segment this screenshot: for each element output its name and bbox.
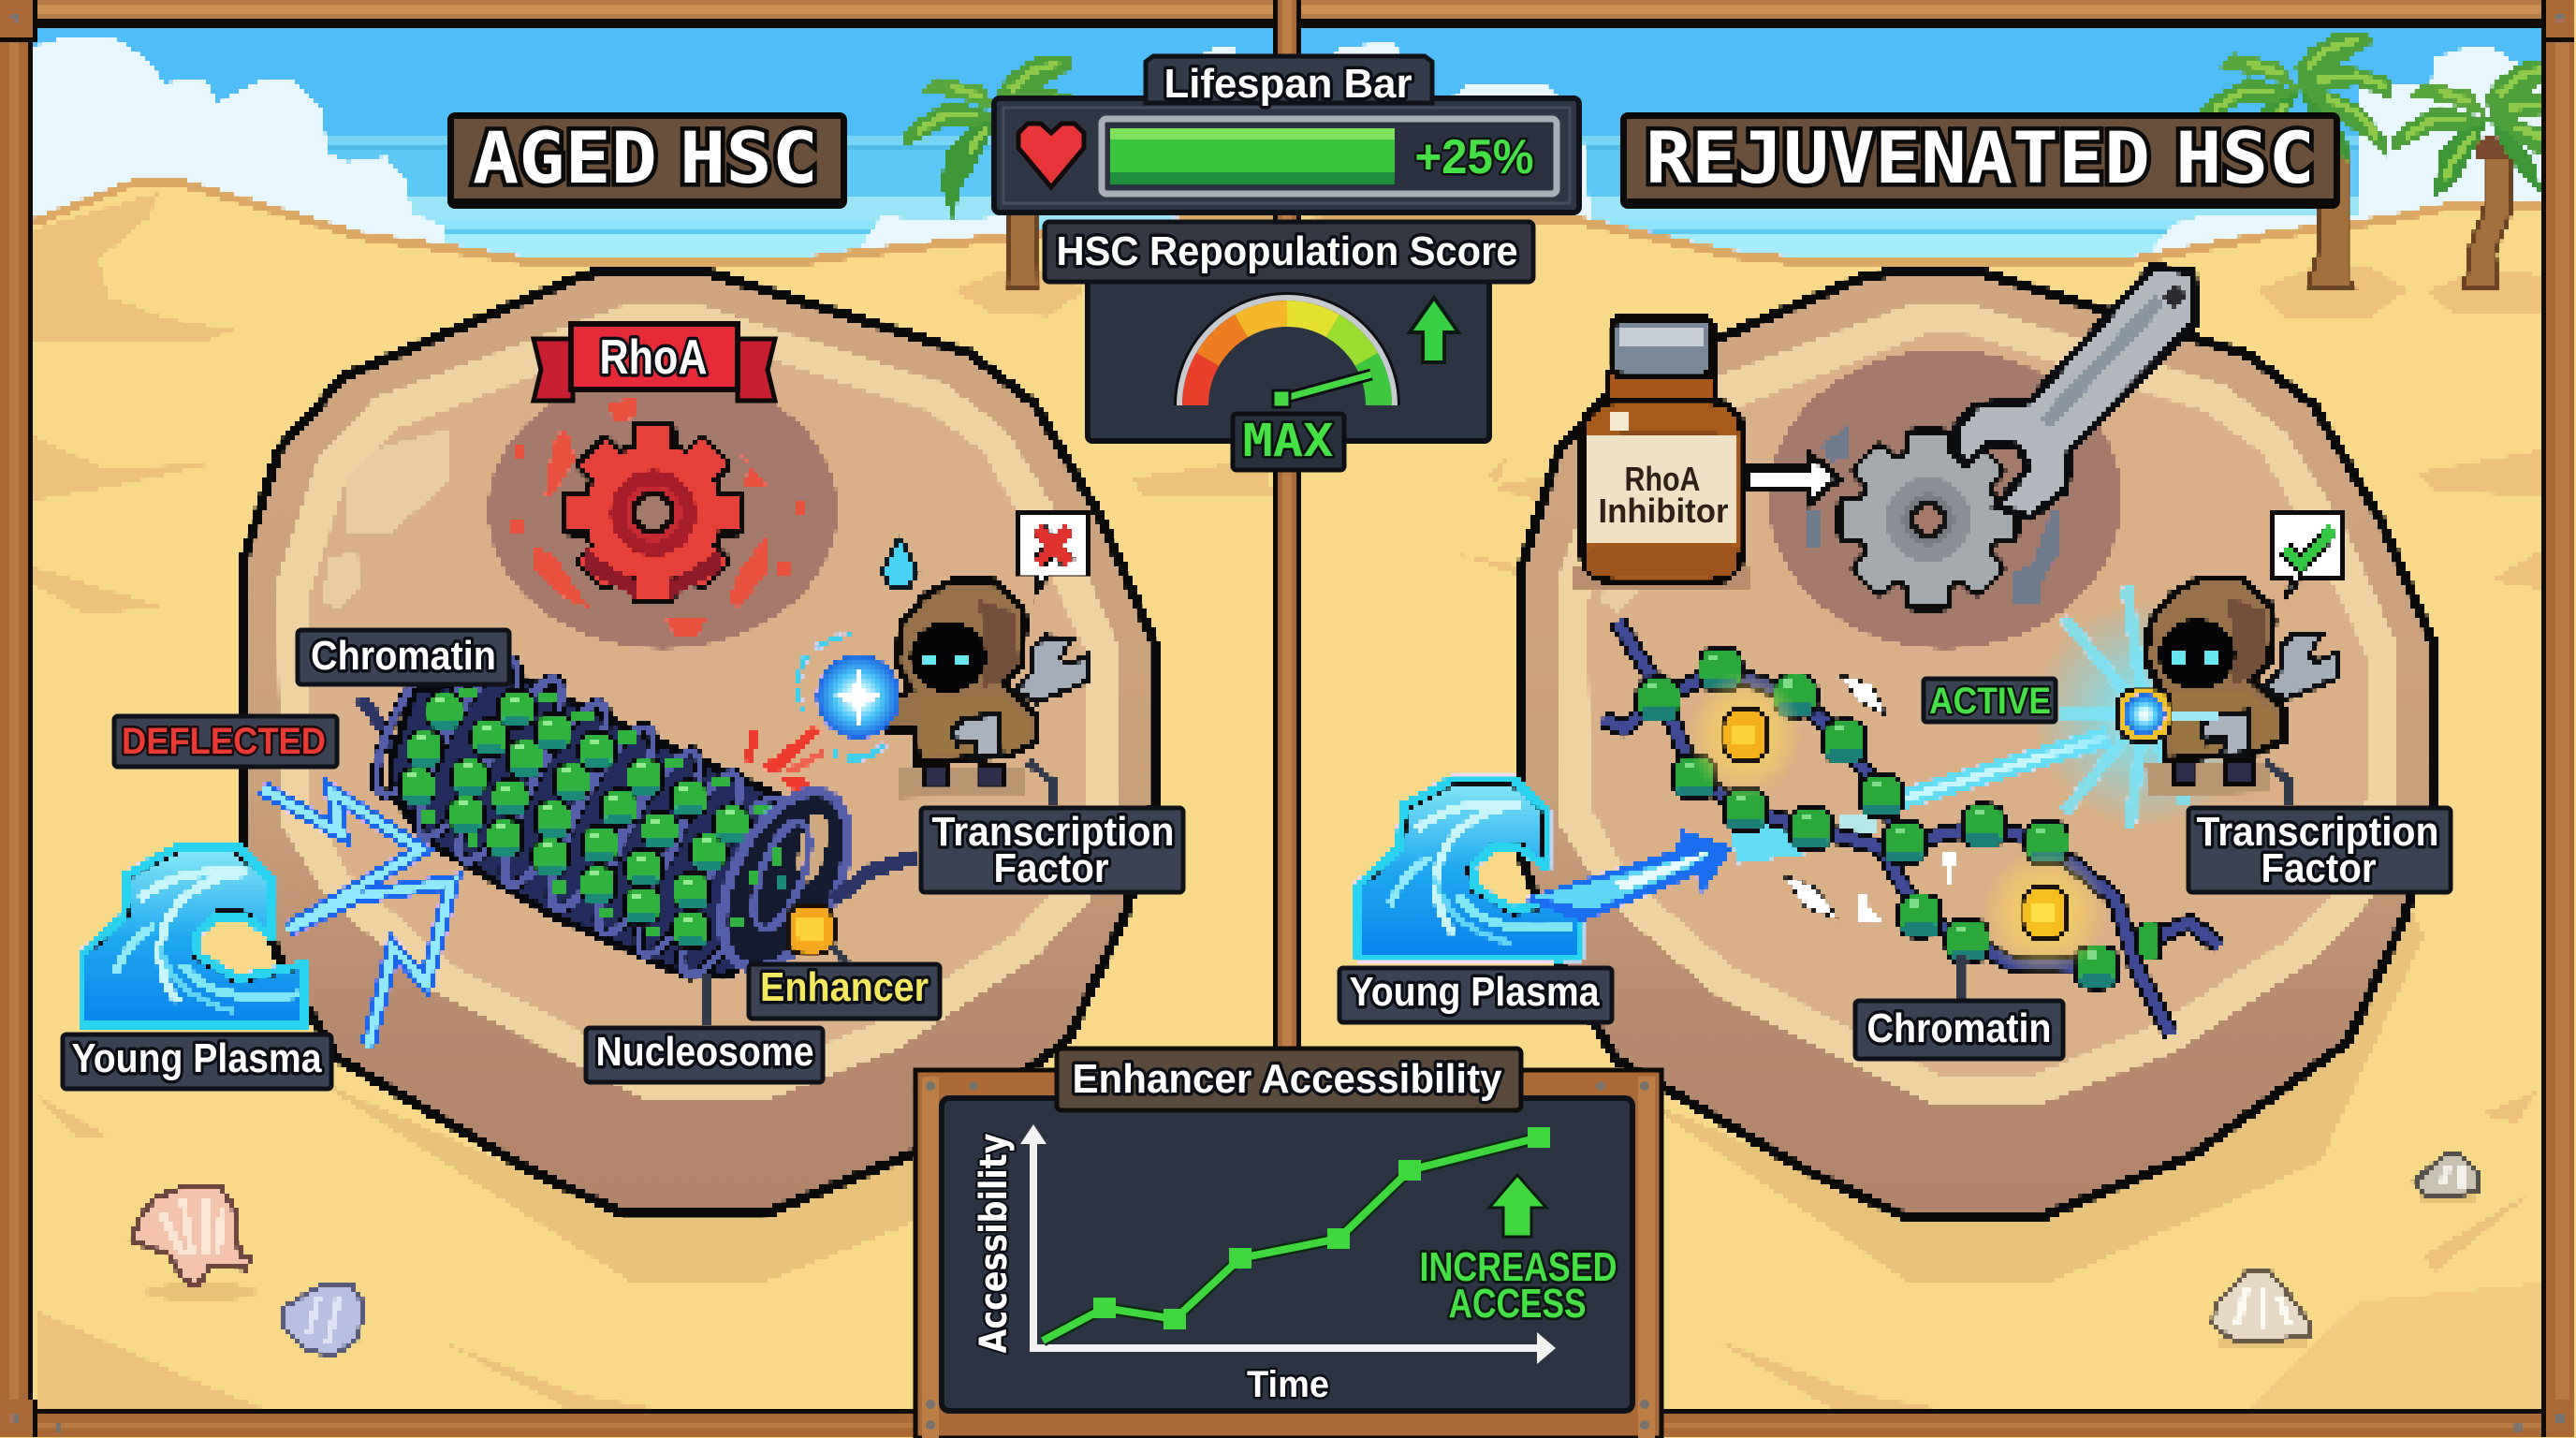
- icon: red blocked signal marks: [742, 726, 824, 791]
- nucleus rejuvenated: [1768, 349, 2122, 649]
- panel: aged cell: [82, 271, 1154, 1214]
- icon: wrench: [1955, 267, 2195, 518]
- panel: enhancer accessibility chart: [915, 1070, 1661, 1438]
- icon: young plasma wave right: [1358, 779, 1580, 958]
- title: aged HSC: HSC: [680, 116, 818, 199]
- label: RhoA inhibitor: Inhibitor: [1599, 492, 1728, 530]
- icon: red energy particles: [510, 398, 807, 638]
- label: RhoA inhibitor: RhoA: [1625, 460, 1700, 498]
- arrow: increased up: [1489, 1175, 1546, 1237]
- icon: white shell: [2213, 1271, 2310, 1348]
- callout: increased access: ACCESS: [1449, 1281, 1586, 1327]
- lifespan percent value: +25%: [1415, 130, 1533, 184]
- label: nucleosome: Nucleosome: [595, 1029, 814, 1075]
- y axis label: Accessibility: [973, 1133, 1016, 1354]
- sky and sea background: [0, 0, 2576, 271]
- title: rejuvenated HSC: [1620, 112, 2340, 209]
- chart: open chromatin strand: [1603, 621, 2220, 1034]
- icon: pink shell: [131, 1187, 257, 1301]
- arrow: plasma entering cell: [1521, 829, 1734, 922]
- label: young plasma right: Young Plasma: [1350, 969, 1600, 1015]
- icon: lilac shell: [281, 1284, 365, 1357]
- icon: rotation arrows: [1805, 424, 2059, 606]
- icon: white sparkles: [1783, 674, 1958, 922]
- icon: deflected lightning: [262, 788, 452, 1047]
- connector: chromatin label to coil: [360, 697, 402, 754]
- label: RhoA inhibitor: [1599, 460, 1728, 530]
- panel: lifespan bar: [994, 98, 1579, 213]
- label: active: ACTIVE: [1929, 681, 2051, 722]
- icon: young plasma beam to orb: [1734, 737, 2108, 847]
- icon: hooded transcription factor right: [2135, 578, 2337, 796]
- label: transcription factor left: Factor: [994, 845, 1108, 891]
- icon: young plasma wave left: [82, 847, 304, 1026]
- icon: blue energy orb: [798, 634, 900, 758]
- palm tree right 1: [2202, 33, 2408, 318]
- chart line: [1043, 1127, 1550, 1341]
- chart axes: [1020, 1124, 1556, 1364]
- icon: grey repaired gear: [1842, 433, 2014, 606]
- connectors: right label leaders: [1963, 760, 2289, 1002]
- icon: water drop: [882, 538, 917, 588]
- icon: green check speech bubble: [2272, 513, 2344, 595]
- heading: enhancer accessibility: Enhancer Accessibility: [1073, 1056, 1502, 1102]
- gauge arc: [1179, 298, 1395, 405]
- heading: HSC repopulation score: HSC Repopulation Score: [1056, 228, 1518, 274]
- clouds: [33, 37, 2544, 281]
- callout: increased access: [1419, 1244, 1617, 1327]
- callout: increased access: INCREASED: [1419, 1244, 1617, 1290]
- gauge value MAX: MAX: [1243, 415, 1334, 467]
- icon: red overactive gear: [567, 427, 739, 599]
- title: rejuvenated HSC: REJUVENATED: [1646, 116, 2150, 199]
- arrow: bottle to gear: [1746, 453, 1839, 504]
- label: transcription factor left: [921, 808, 1183, 892]
- label: transcription factor left: Transcription: [932, 809, 1174, 855]
- icon: grey pebble shell: [2415, 1155, 2479, 1205]
- chart: closed chromatin coil: [360, 640, 874, 989]
- label: enhancer: Enhancer: [760, 964, 929, 1010]
- label: chromatin left: Chromatin: [311, 633, 496, 679]
- icon: RhoA inhibitor bottle shape: [1574, 318, 1752, 592]
- icon: hooded transcription factor left: [886, 580, 1089, 799]
- icon: cyan energy burst: [2032, 587, 2257, 829]
- connectors: left label leaders: [705, 761, 1053, 1026]
- arrow: gauge up: [1410, 298, 1458, 362]
- label: deflected: DEFLECTED: [122, 721, 326, 762]
- icon: yellow enhancer coin: [787, 904, 834, 955]
- palm tree right 2: [2392, 61, 2576, 314]
- title: aged HSC: AGED: [473, 116, 657, 199]
- icon: glowing active orb: [2117, 688, 2218, 741]
- icon: red cross speech bubble: [1017, 512, 1089, 594]
- label: chromatin right: Chromatin: [1866, 1005, 2052, 1051]
- label: transcription factor right: Factor: [2261, 845, 2376, 891]
- label: transcription factor right: [2188, 808, 2451, 892]
- gauge needle: [1273, 374, 1371, 407]
- panel: rejuvenated cell: [1358, 267, 2434, 1216]
- lifespan bar meter: [1102, 119, 1557, 194]
- title: aged HSC: [447, 112, 847, 209]
- x axis label: Time: [1247, 1364, 1329, 1405]
- icon: heart: [1018, 124, 1084, 187]
- label: young plasma left: Young Plasma: [71, 1035, 322, 1081]
- label: RhoA banner: RhoA: [599, 330, 708, 385]
- label: transcription factor right: Transcription: [2196, 809, 2439, 855]
- title: rejuvenated HSC: HSC: [2175, 116, 2315, 199]
- cell shadows on sand: [309, 899, 2424, 1283]
- panel: repopulation gauge: [1088, 276, 1489, 441]
- palm tree left: [903, 56, 1095, 316]
- heading: lifespan bar: Lifespan Bar: [1164, 61, 1412, 107]
- nucleus aged: [488, 372, 838, 649]
- gauge value MAX: [1233, 414, 1344, 470]
- label: RhoA banner: [534, 324, 775, 401]
- icon: enhancer coins exposed: [1687, 671, 2108, 976]
